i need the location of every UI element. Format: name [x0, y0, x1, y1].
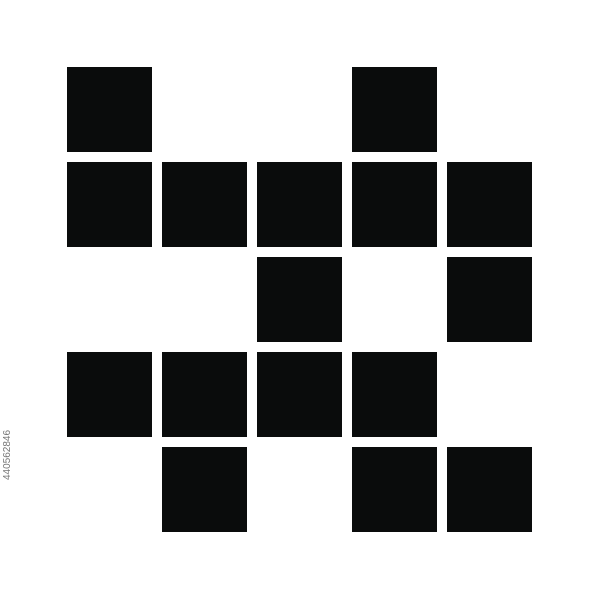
row 3 squares — [257, 257, 532, 342]
row 1 squares — [67, 67, 437, 152]
stock id text: 440562846 — [2, 430, 13, 480]
row 2 squares — [67, 162, 532, 247]
row 4 squares — [67, 352, 437, 437]
